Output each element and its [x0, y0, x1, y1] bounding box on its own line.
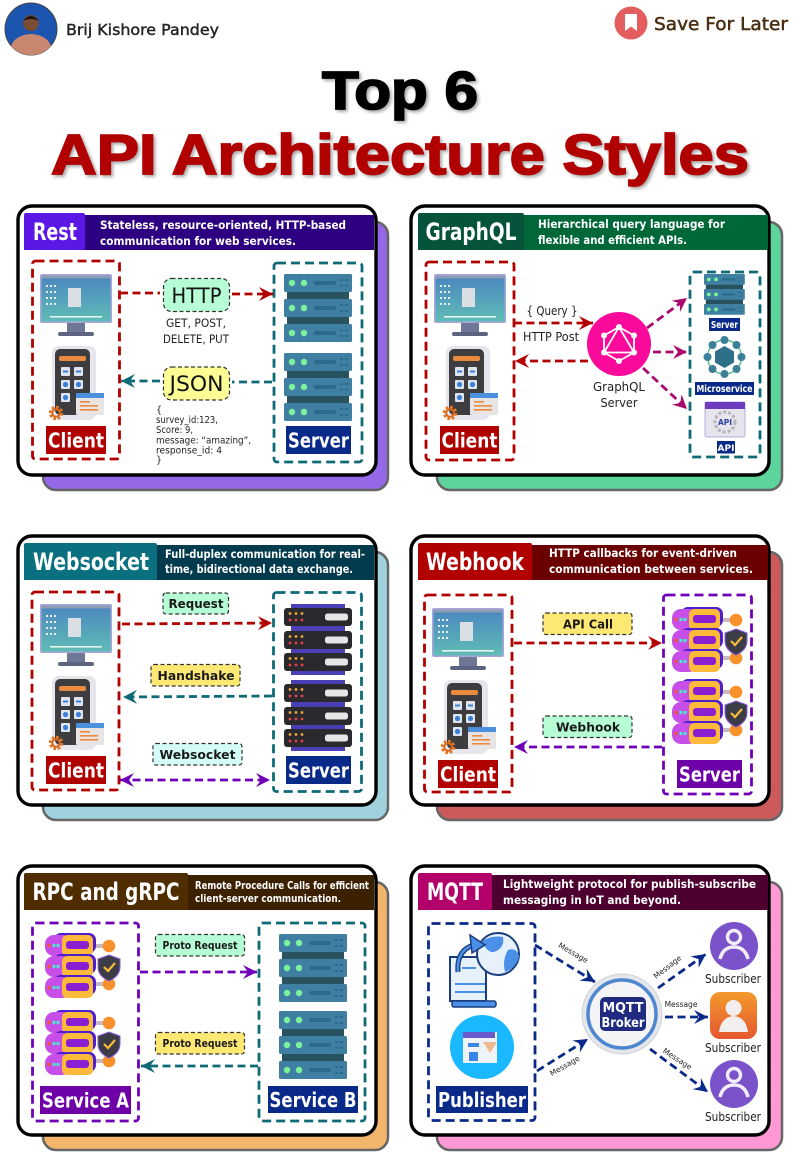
service B group [259, 923, 365, 1121]
query labels: HTTP Post [523, 329, 579, 344]
header bar: messaging in IoT and beyond. [503, 893, 681, 907]
publisher group [428, 924, 535, 1120]
publisher to broker arrows [535, 945, 595, 1071]
proto request pill [156, 934, 244, 956]
GraphQL server label [593, 379, 645, 410]
arrow: request [122, 623, 272, 624]
header bar: Rest [33, 218, 77, 246]
publisher group: Publisher [438, 1088, 527, 1112]
JSON payload [156, 405, 251, 466]
HTTP pill [164, 278, 230, 312]
broker: Broker [602, 1016, 645, 1031]
JSON payload: response_id: 4 [156, 446, 222, 456]
subscriber 3: Subscriber [705, 1109, 762, 1124]
header bar: flexible and efficient APIs. [538, 233, 687, 247]
header bar: client-server communication. [195, 893, 341, 905]
handshake pill: Handshake [158, 668, 234, 683]
server group: Server [288, 428, 350, 452]
client group [424, 595, 512, 792]
client group: Client [440, 762, 496, 786]
avatar [5, 3, 57, 55]
message labels: Message [665, 1000, 698, 1009]
message labels: Message [557, 941, 590, 965]
backend: microservice [695, 336, 754, 395]
websocket pill [153, 744, 242, 765]
subscriber 1 [705, 922, 762, 986]
GraphQL server label: GraphQL [593, 379, 645, 394]
arrow: handshake [123, 696, 272, 697]
header bar: HTTP callbacks for event-driven [549, 546, 737, 560]
header bar: Websocket [33, 548, 149, 576]
HTTP methods [163, 316, 230, 346]
fan-out arrows [643, 298, 687, 409]
broker: MQTT [602, 1001, 644, 1016]
client group [32, 261, 120, 459]
header bar: RPC and gRPC [32, 878, 180, 906]
API call pill: API Call [563, 616, 613, 632]
subscriber 2 [705, 992, 762, 1055]
save for later badge [614, 6, 789, 40]
header bar: Hierarchical query language for [538, 217, 725, 231]
icon: document and globe [450, 933, 519, 1007]
subscriber 1: Subscriber [705, 971, 762, 986]
JSON payload: message: “amazing”, [156, 436, 251, 446]
backend: API: API [718, 444, 734, 454]
header bar: time, bidirectional data exchange. [165, 562, 353, 576]
header bar [418, 873, 768, 910]
JSON pill: JSON [167, 372, 224, 396]
request pill: Request [168, 596, 224, 611]
HTTP methods: DELETE, PUT [163, 332, 230, 346]
message labels: Message [661, 1046, 694, 1072]
server group: Server [288, 758, 350, 782]
websocket pill: Websocket [160, 747, 236, 762]
save for later badge: Save For Later [654, 14, 789, 35]
backend: server [704, 274, 745, 331]
backend: API: API [718, 418, 732, 427]
arrow: HTTP request [120, 293, 273, 294]
backend: API [705, 402, 745, 454]
query labels [523, 303, 579, 344]
title: API Architecture Styles [51, 123, 749, 187]
header bar [418, 213, 768, 250]
panel: Webhook [411, 536, 782, 820]
panel: Websocket [18, 536, 388, 820]
proto response pill: Proto Request [162, 1037, 238, 1050]
client group [32, 592, 119, 790]
icon: browser in circle [450, 1015, 514, 1079]
arrows: query and response [514, 323, 593, 361]
handshake pill [151, 664, 240, 686]
header bar [24, 543, 374, 580]
header: author [5, 3, 219, 55]
header bar: MQTT [427, 878, 483, 906]
backend: microservice: Microservice [696, 384, 752, 395]
subscriber 2: Subscriber [705, 1040, 762, 1055]
panel: Rest [18, 206, 388, 490]
proto request pill: Proto Request [162, 939, 238, 952]
request pill [163, 593, 228, 614]
service A group [32, 923, 138, 1121]
server group [664, 595, 752, 794]
HTTP methods: GET, POST, [166, 316, 226, 330]
backends box [690, 272, 760, 457]
webhook pill [543, 716, 632, 738]
proto response pill [156, 1032, 244, 1054]
server group [274, 592, 362, 792]
title: Top 6 [322, 61, 478, 121]
title [51, 61, 749, 187]
header bar: Full-duplex communication for real- [165, 547, 365, 561]
service A group: Service A [42, 1088, 129, 1112]
API call pill [543, 613, 632, 634]
broker to subscriber arrows [650, 954, 708, 1092]
client group: Client [442, 428, 498, 452]
header bar [418, 543, 768, 580]
panel: MQTT [411, 866, 782, 1150]
webhook pill: Webhook [556, 720, 621, 734]
broker [582, 974, 662, 1054]
panel: RPC and gRPC [18, 866, 388, 1150]
client group [426, 262, 514, 460]
header bar: communication between services. [549, 562, 753, 576]
client group: Client [48, 428, 104, 452]
panel: GraphQL [411, 206, 782, 490]
arrow: proto request [140, 971, 257, 973]
arrow: proto response [141, 1065, 258, 1067]
client group: Client [48, 758, 104, 782]
JSON pill [164, 367, 230, 400]
JSON payload: { [156, 405, 162, 416]
arrow: API call [514, 642, 662, 644]
subscriber 3 [705, 1060, 762, 1124]
header bar: Lightweight protocol for publish-subscribe [503, 877, 756, 891]
query labels: { Query } [526, 303, 578, 318]
arrow: bidirectional [120, 779, 270, 781]
service B group: Service B [270, 1088, 356, 1112]
HTTP pill: HTTP [172, 284, 222, 308]
header bar [24, 213, 374, 250]
arrow: webhook [514, 746, 662, 748]
arrow: JSON response [121, 381, 272, 382]
header bar: GraphQL [426, 218, 516, 246]
JSON payload: survey_id:123, [156, 415, 218, 426]
message labels: Message [652, 953, 683, 981]
header bar [24, 873, 374, 910]
message labels [548, 941, 698, 1078]
JSON payload: } [156, 455, 162, 466]
message labels: Message [548, 1054, 582, 1078]
header bar: Stateless, resource-oriented, HTTP-based [100, 218, 346, 232]
server group [274, 263, 362, 462]
header bar: Remote Procedure Calls for efficient [195, 880, 369, 892]
JSON payload: Score: 9, [156, 425, 193, 436]
header bar: communication for web services. [100, 234, 296, 248]
GraphQL server icon [587, 312, 651, 376]
header bar: Webhook [426, 548, 525, 576]
GraphQL server label: Server [600, 395, 638, 410]
backend: server: Server [711, 320, 738, 331]
server group: Server [679, 762, 741, 786]
author name: Brij Kishore Pandey [66, 21, 219, 39]
